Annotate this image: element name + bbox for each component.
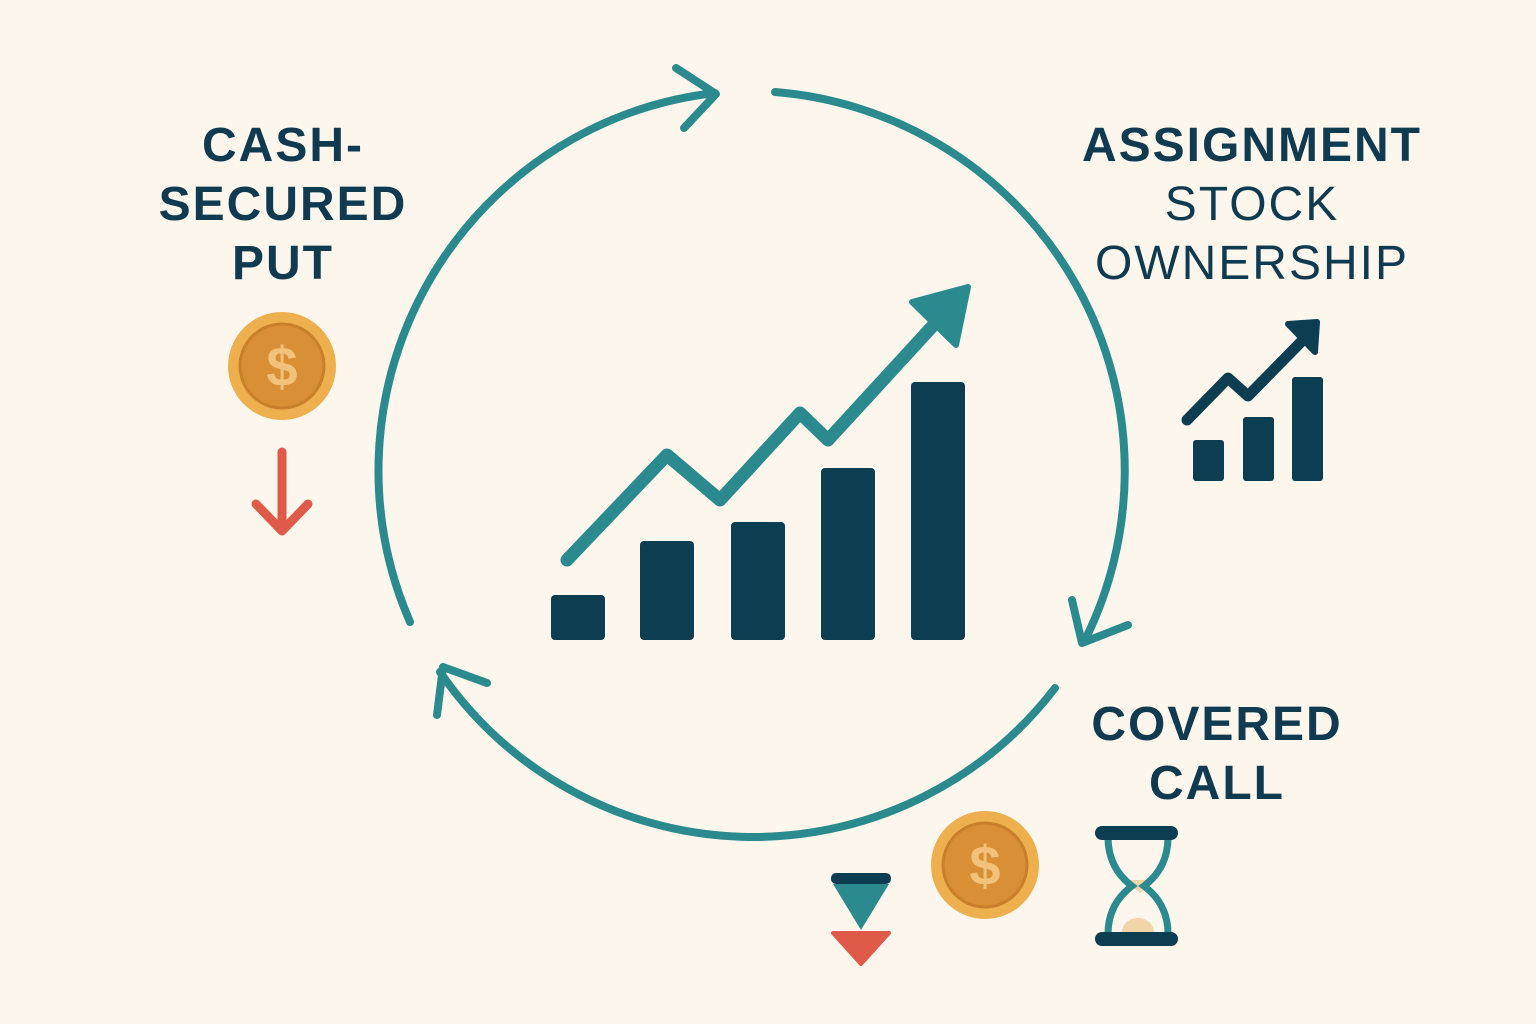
icon: small growth chart bbox=[1187, 322, 1323, 481]
icon: hourglass bbox=[1095, 826, 1178, 946]
icon: funnel triangles bbox=[831, 873, 891, 964]
arrow: top arc to right bbox=[775, 92, 1128, 643]
central chart bbox=[551, 287, 968, 640]
icon: coin left bbox=[228, 312, 336, 420]
label: covered call: CALL bbox=[1149, 757, 1285, 810]
label: assignment stock ownership: STOCK bbox=[1165, 178, 1339, 231]
arrow: left arc to top bbox=[378, 68, 716, 622]
label: cash-secured put: PUT bbox=[232, 237, 334, 290]
icon: red down arrow bbox=[256, 452, 308, 531]
label: assignment stock ownership: OWNERSHIP bbox=[1095, 237, 1409, 290]
label: assignment stock ownership: ASSIGNMENT bbox=[1082, 119, 1422, 172]
label: cash-secured put bbox=[159, 119, 407, 290]
label: covered call bbox=[1091, 698, 1343, 810]
arrow: bottom arc to left bbox=[437, 667, 1055, 837]
icon: coin bottom: $ bbox=[969, 834, 1001, 897]
icon: coin bottom bbox=[931, 811, 1039, 919]
label: covered call: COVERED bbox=[1091, 698, 1343, 751]
label: assignment stock ownership bbox=[1082, 119, 1422, 290]
icon: coin left: $ bbox=[266, 335, 298, 398]
label: cash-secured put: SECURED bbox=[159, 178, 407, 231]
label: cash-secured put: CASH- bbox=[202, 119, 364, 172]
